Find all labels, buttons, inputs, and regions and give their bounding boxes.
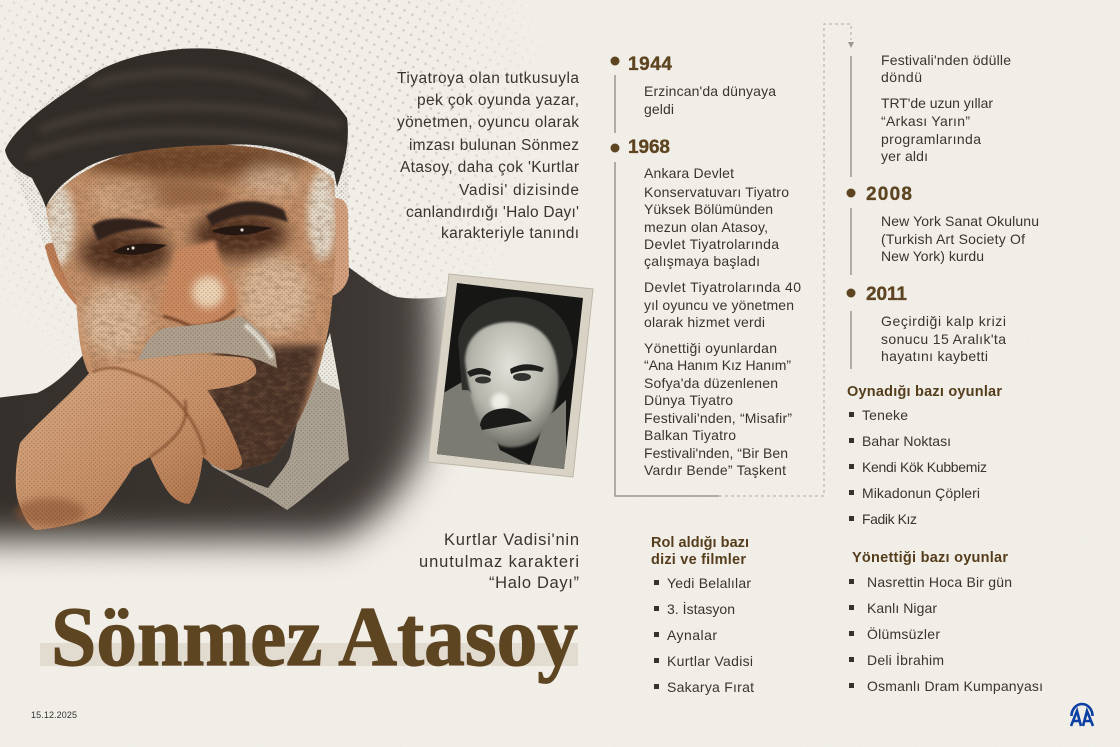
timeline 1968: Yönettiği oyunlardan xyxy=(644,340,777,356)
timeline continuation: “Arkası Yarın” xyxy=(881,113,970,129)
timeline 1968: Konservatuvarı Tiyatro xyxy=(644,184,789,200)
timeline 1968: olarak hizmet verdi xyxy=(644,314,765,330)
timeline continuation: döndü xyxy=(881,69,922,85)
timeline 2011: hayatını kaybetti xyxy=(881,348,988,364)
list: plays directed: Nasrettin Hoca Bir gün xyxy=(867,574,1012,590)
list: series and films: Aynalar xyxy=(667,627,717,643)
halftone dot backdrop xyxy=(0,0,535,354)
list: plays acted xyxy=(847,384,1002,527)
caption: Kurtlar Vadisi'nin xyxy=(444,531,579,549)
timeline 1944: Erzincan'da dünyaya xyxy=(644,83,776,99)
timeline 2008 xyxy=(846,184,1039,264)
timeline 1968: Vardır Bende” Taşkent xyxy=(644,462,786,478)
timeline continuation: programlarında xyxy=(881,131,981,147)
list: plays directed: Osmanlı Dram Kumpanyası xyxy=(867,678,1043,694)
timeline 2008: 2008 xyxy=(866,184,912,205)
finger creases xyxy=(92,368,205,457)
timeline 2011: 2011 xyxy=(866,284,907,305)
timeline continuation: Festivali'nden ödülle xyxy=(881,52,1011,68)
timeline 1968: Festivali'nden, “Bir Ben xyxy=(644,445,788,461)
caption xyxy=(419,531,579,592)
timeline 1968: “Ana Hanım Kız Hanım” xyxy=(644,357,791,373)
list: series and films xyxy=(651,535,754,695)
timeline 1968: yıl oyuncu ve yönetmen xyxy=(644,297,794,313)
timeline 2011: Geçirdiği kalp krizi xyxy=(881,313,1006,329)
face shading xyxy=(40,140,340,480)
list: plays directed: Yönettiği bazı oyunlar xyxy=(852,550,1008,566)
caption: “Halo Dayı” xyxy=(489,574,579,592)
hand shadow xyxy=(15,498,85,526)
timeline 2011: sonucu 15 Aralık'ta xyxy=(881,331,1006,347)
list: plays acted: Kendi Kök Kubbemiz xyxy=(862,459,987,475)
eyes xyxy=(112,225,272,255)
date: 15.12.2025 xyxy=(31,710,77,720)
title: Sönmez Atasoy xyxy=(51,590,578,684)
hand xyxy=(16,355,256,530)
ears xyxy=(45,198,349,305)
timeline 2008: New York) kurdu xyxy=(881,248,984,264)
intro paragraph: Vadisi' dizisinde xyxy=(459,182,579,199)
timeline 1944 xyxy=(610,54,776,117)
timeline 2011 xyxy=(846,284,1006,364)
old photograph xyxy=(428,274,593,477)
timeline continuation: yer aldı xyxy=(881,148,928,164)
portrait: Halo Dayı xyxy=(0,47,446,570)
timeline 1968: Yüksek Bölümünden xyxy=(644,201,773,217)
list: plays directed: Ölümsüzler xyxy=(867,625,940,642)
timeline 1968: Dünya Tiyatro xyxy=(644,392,733,408)
timeline 1944: geldi xyxy=(644,101,674,117)
timeline continuation: TRT'de uzun yıllar xyxy=(881,95,993,111)
intro paragraph: yönetmen, oyuncu olarak xyxy=(397,114,579,131)
intro paragraph: imzası bulunan Sönmez xyxy=(409,137,579,154)
timeline 1968: Devlet Tiyatrolarında xyxy=(644,236,779,252)
halftone overlay xyxy=(5,47,349,530)
list: series and films: 3. İstasyon xyxy=(667,600,735,617)
list: plays acted: Bahar Noktası xyxy=(862,433,951,449)
list: series and films: Kurtlar Vadisi xyxy=(667,653,753,669)
timeline 1968 xyxy=(610,137,801,478)
list: plays acted: Fadik Kız xyxy=(862,511,917,527)
intro paragraph: Atasoy, daha çok 'Kurtlar xyxy=(400,159,579,176)
list: series and films: dizi ve filmler xyxy=(651,552,746,568)
list: series and films: Yedi Belalılar xyxy=(667,575,751,591)
timeline 1968: Balkan Tiyatro xyxy=(644,427,736,443)
timeline 2008: (Turkish Art Society Of xyxy=(881,231,1025,247)
intro paragraph: Tiyatroya olan tutkusuyla xyxy=(397,70,579,87)
shirt highlight xyxy=(316,333,340,390)
timeline 1968: 1968 xyxy=(628,137,670,158)
timeline 1968: mezun olan Atasoy, xyxy=(644,219,768,235)
jacket xyxy=(0,267,446,570)
timeline connectors xyxy=(615,24,854,496)
list: series and films: Rol aldığı bazı xyxy=(651,535,749,551)
timeline 2008: New York Sanat Okulunu xyxy=(881,213,1039,229)
intro paragraph: pek çok oyunda yazar, xyxy=(417,92,579,109)
timeline 1968: Festivali'nden, “Misafir” xyxy=(644,410,792,426)
timeline 1968: Ankara Devlet xyxy=(644,165,734,181)
timeline 1968: Devlet Tiyatrolarında 40 xyxy=(644,279,801,295)
caption: unutulmaz karakteri xyxy=(419,553,579,571)
nose xyxy=(160,240,237,326)
list: plays acted: Mikadonun Çöpleri xyxy=(862,485,980,501)
timeline 1944: 1944 xyxy=(628,54,672,75)
shirt collar xyxy=(207,333,349,510)
list: plays directed: Kanlı Nigar xyxy=(867,600,937,616)
hat xyxy=(5,48,348,208)
intro paragraph: karakteriyle tanındı xyxy=(441,225,579,242)
eyebrows xyxy=(92,201,288,241)
intro paragraph: canlandırdığı 'Halo Dayı' xyxy=(406,204,579,221)
list: plays acted: Oynadığı bazı oyunlar xyxy=(847,384,1002,400)
hat texture xyxy=(28,72,342,155)
photo image xyxy=(437,283,583,469)
timeline 1968: çalışmaya başladı xyxy=(644,253,760,269)
timeline continuation xyxy=(881,52,1011,164)
list: plays directed: Deli İbrahim xyxy=(867,651,944,668)
intro paragraph xyxy=(397,70,579,242)
face xyxy=(46,144,336,470)
logo: AA xyxy=(1071,704,1093,726)
list: plays acted: Teneke xyxy=(862,407,908,423)
list: series and films: Sakarya Fırat xyxy=(667,679,754,695)
list: plays directed xyxy=(849,550,1043,694)
moustache highlight xyxy=(245,325,272,358)
moustache xyxy=(138,316,277,368)
timeline 1968: Sofya'da düzenlenen xyxy=(644,375,778,391)
